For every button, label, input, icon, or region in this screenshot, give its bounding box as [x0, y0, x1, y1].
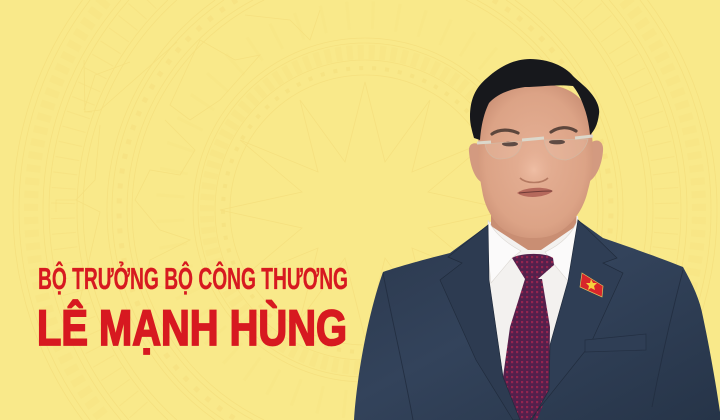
portrait: [354, 59, 720, 420]
mouth: [517, 188, 553, 197]
right ear: [590, 140, 603, 181]
left ear: [469, 143, 481, 182]
breast pocket: [585, 334, 646, 352]
face: [478, 84, 593, 238]
right lapel: [530, 220, 623, 420]
neck: [491, 205, 577, 250]
shirt collar: [488, 219, 578, 283]
eyes: [502, 140, 565, 146]
suit jacket: [354, 220, 720, 420]
sleeve seams: [383, 270, 683, 420]
nose: [516, 146, 552, 186]
heading: job title and name: [37, 260, 348, 356]
job title: BỘ TRƯỞNG BỘ CÔNG THƯƠNG: [38, 260, 348, 296]
eyebrows: [492, 128, 576, 134]
left lapel: [440, 225, 520, 420]
flag lapel pin: [580, 273, 603, 297]
necktie: [503, 254, 554, 420]
person name: LÊ MẠNH HÙNG: [37, 300, 347, 356]
glasses: [477, 136, 593, 160]
shirt: [488, 216, 580, 376]
hair: [470, 59, 599, 140]
nose shadow: [520, 178, 548, 182]
